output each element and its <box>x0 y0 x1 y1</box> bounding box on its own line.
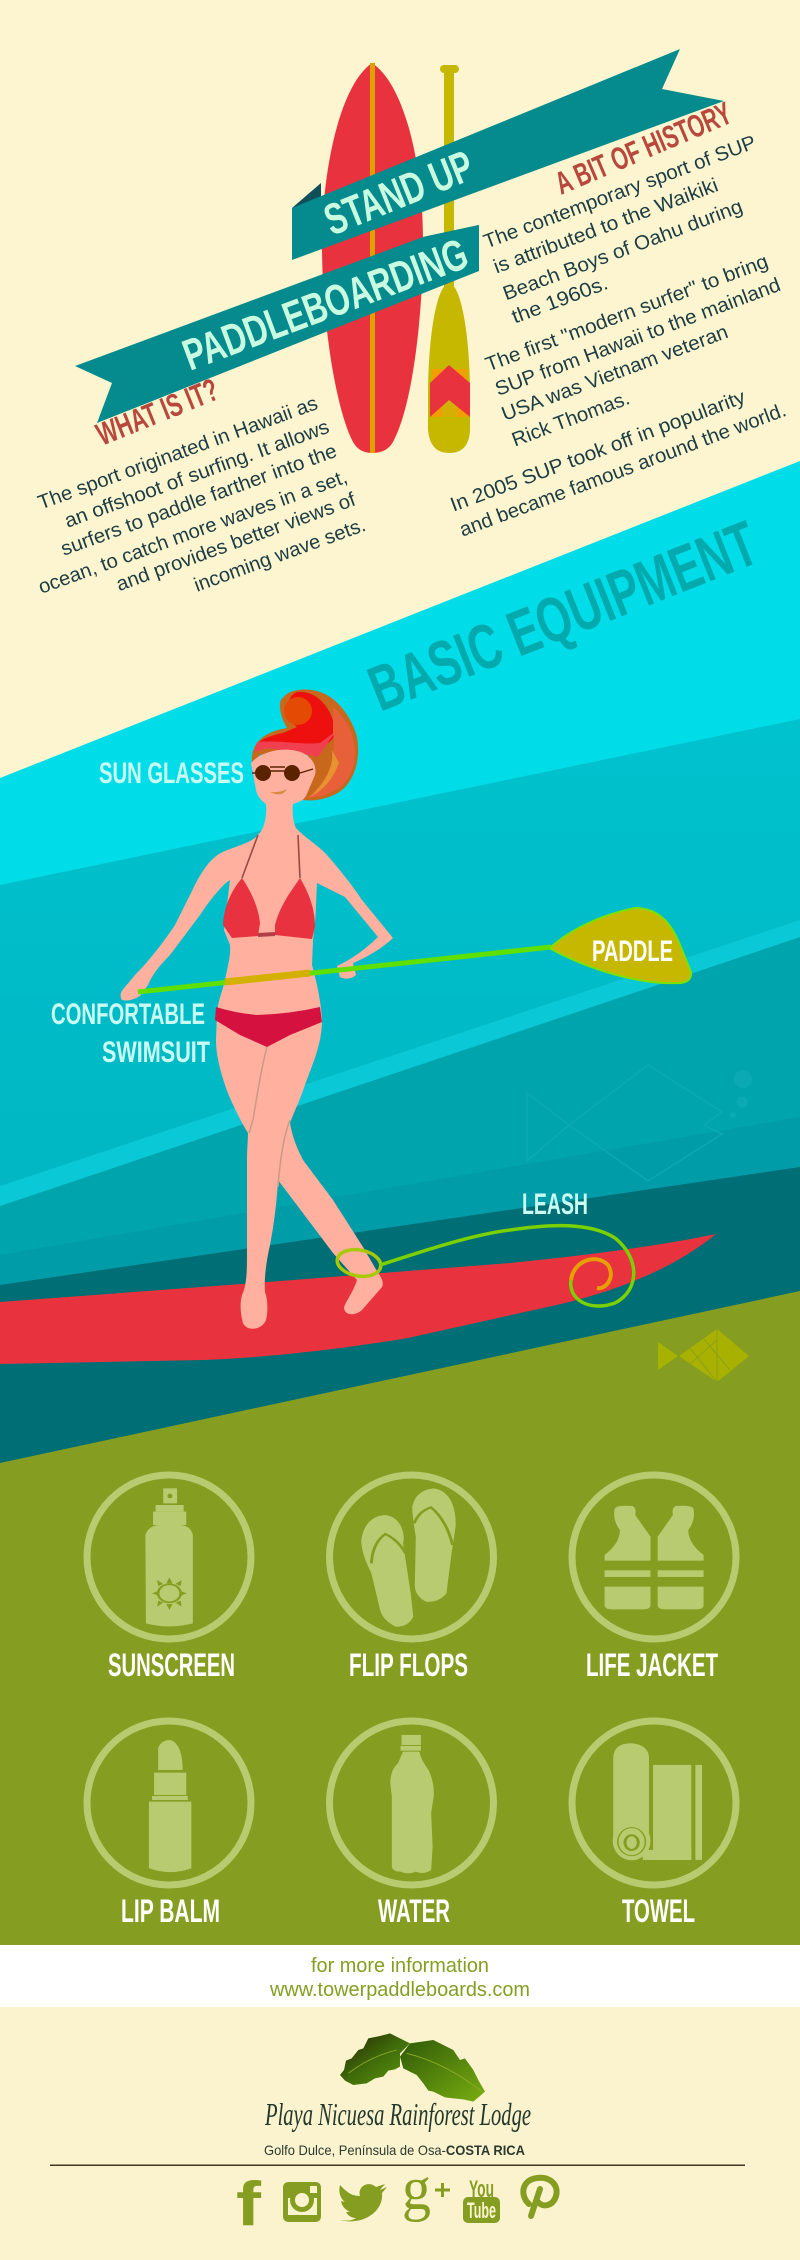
equipment grid <box>87 1475 736 1929</box>
text block: a bit of history: and became famous around the world. <box>457 399 789 541</box>
icon: pinterest <box>523 2178 557 2216</box>
ribbon: lower banner with PADDLEBOARDING <box>75 225 479 423</box>
icon: background fish outline <box>527 1065 752 1181</box>
text block: a bit of history: The contemporary sport of SUP <box>481 131 759 253</box>
logo: banana leaves <box>340 2033 485 2102</box>
icon: youtube <box>463 2176 500 2223</box>
panel: more information band: for more information <box>311 1955 489 1977</box>
illustration: woman on the board <box>121 690 393 1329</box>
social icons <box>236 2156 557 2239</box>
text block: a bit of history <box>447 95 789 541</box>
panel: more information band: www.towerpaddleboards.com <box>269 1979 530 2001</box>
text block: a bit of history: Rick Thomas. <box>509 387 633 451</box>
heading: paddleboarding: PADDLEBOARDING <box>176 229 475 380</box>
label: leash: LEASH <box>522 1188 588 1221</box>
icon: twitter <box>339 2184 387 2221</box>
label: FLIP FLOPS <box>349 1647 468 1683</box>
label: paddle: PADDLE <box>592 935 673 968</box>
label: TOWEL <box>622 1893 695 1929</box>
illustration: wooden paddle in the hero <box>428 65 470 453</box>
sunglasses <box>252 765 313 781</box>
heading: stand up: STAND UP <box>317 141 480 245</box>
text block: what is it: surfers to paddle farther into the <box>58 440 340 561</box>
text block: what is it: ocean, to catch more waves in a set, <box>36 466 350 599</box>
illustration: leash cord <box>335 1226 634 1306</box>
item: lip balm <box>87 1721 251 1929</box>
item: sunscreen <box>87 1475 251 1683</box>
item: life jacket <box>572 1475 736 1683</box>
text block: a bit of history: is attributed to the Waikiki <box>491 174 721 278</box>
item: towel <box>572 1721 736 1929</box>
panel: green equipment background <box>0 1291 800 1945</box>
hair <box>252 690 358 800</box>
label: LIFE JACKET <box>586 1647 718 1683</box>
text block: what is it <box>35 371 369 599</box>
icon: google plus: g <box>402 2156 431 2223</box>
text block: what is it: incoming wave sets. <box>191 514 369 597</box>
label: comfortable swimsuit: SWIMSUIT <box>102 1036 210 1069</box>
panel: ocean background <box>0 461 800 1470</box>
label: comfortable swimsuit: CONFORTABLE <box>51 998 205 1031</box>
skin <box>121 750 393 1329</box>
text block: a bit of history: Beach Boys of Oahu during <box>500 196 746 305</box>
logo text: location: Golfo Dulce, Península de Osa-COSTA RICA <box>264 2142 525 2158</box>
icon: facebook: f <box>236 2170 261 2239</box>
bikini top <box>223 835 315 939</box>
icon: youtube: Tube <box>467 2198 496 2223</box>
text block: what is it: and provides better views of <box>113 489 359 596</box>
ribbon: upper banner with STAND UP <box>292 49 724 260</box>
icon: instagram <box>283 2182 321 2222</box>
logo text: lodge name: Playa Nicuesa Rainforest Lodge <box>264 2096 531 2132</box>
text block: a bit of history: the 1960s. <box>509 272 611 328</box>
text block: what is it: an offshoot of surfing. It allows <box>62 416 332 533</box>
label: WATER <box>378 1893 450 1929</box>
illustration: red board under the rider <box>0 1234 716 1364</box>
label: LIP BALM <box>121 1893 220 1929</box>
item: flip flops <box>330 1475 494 1683</box>
text block: a bit of history: The first "modern surfer" to bring <box>483 251 771 376</box>
icon: google plus <box>402 2156 450 2223</box>
label: sun glasses: SUN GLASSES <box>99 757 244 790</box>
text block: a bit of history: In 2005 SUP took off in popularity <box>447 386 748 516</box>
text block: a bit of history: SUP from Hawaii to the mainland <box>492 274 784 401</box>
text block: a bit of history: USA was Vietnam veteran <box>499 321 731 426</box>
label: comfortable swimsuit <box>51 998 210 1069</box>
illustration: surfboard in the hero <box>322 63 423 453</box>
heading: what is it: WHAT IS IT? <box>91 371 223 452</box>
item: water <box>330 1721 494 1929</box>
bikini bottom <box>215 1007 322 1047</box>
icon: youtube: You <box>469 2176 494 2203</box>
label: SUNSCREEN <box>108 1647 235 1683</box>
icon: small fish on green <box>658 1329 749 1382</box>
text block: what is it: The sport originated in Hawaii as <box>35 392 321 514</box>
mouth <box>270 789 287 794</box>
leg shading <box>249 1047 290 1187</box>
illustration: long paddle <box>138 908 691 992</box>
panel: more information band <box>0 1945 800 2007</box>
